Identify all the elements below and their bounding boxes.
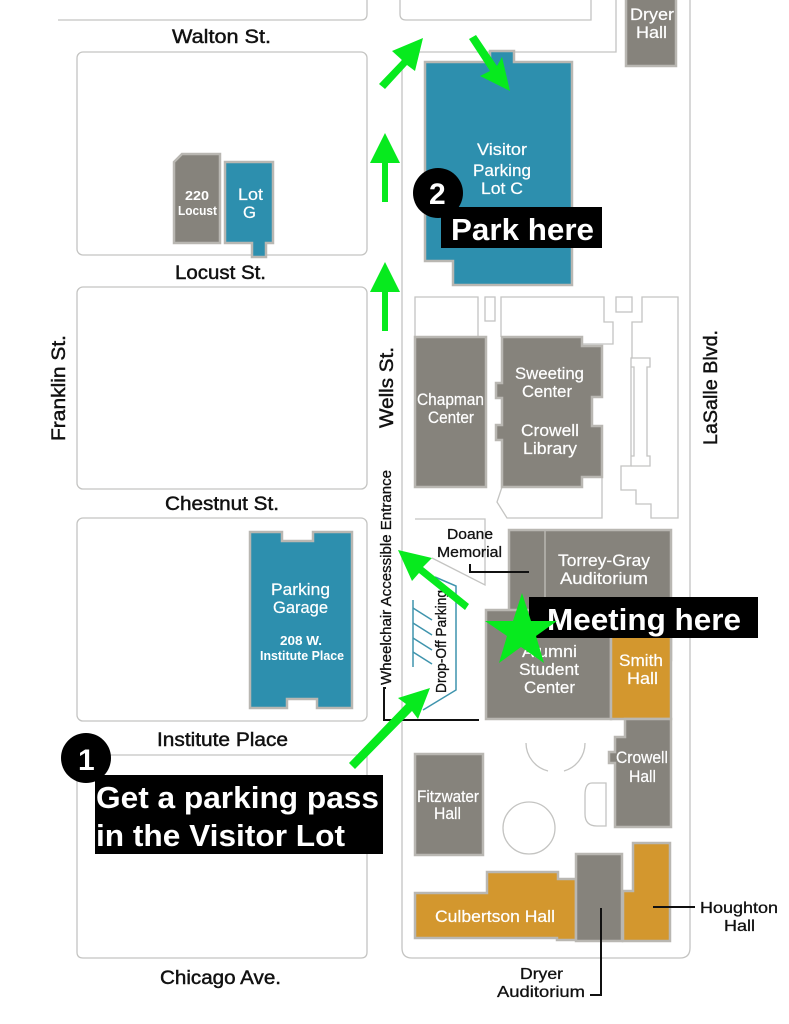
- parking: Lot G: G: [243, 203, 256, 222]
- building: 220 Locust: 220: [185, 188, 209, 203]
- label: Doane Memorial: Memorial: [437, 544, 502, 561]
- street label: Locust St.: Locust St.: [175, 263, 266, 284]
- parking: Lot G: [225, 162, 273, 257]
- arrow: to Walton St.: [379, 38, 423, 89]
- label: Dryer Auditorium: [497, 908, 601, 1001]
- building: Sweeting Center and Crowell Library: [496, 337, 602, 487]
- street label: Franklin St.: Franklin St.: [49, 335, 70, 441]
- parking: Parking Garage: Institute Place: [260, 649, 344, 663]
- step 2 marker: 2: [429, 178, 446, 211]
- icon: meeting star: [485, 593, 557, 663]
- parking: Parking Garage: Parking: [271, 580, 330, 599]
- building: Dryer Hall: Dryer: [630, 5, 674, 24]
- building: Alumni Student Center: [486, 610, 611, 719]
- label: Houghton Hall: [653, 900, 778, 935]
- callout: Get a parking pass in the Visitor Lot: [95, 775, 383, 854]
- parking: Lot G: Lot: [238, 185, 263, 204]
- unlabeled grounds outlines: [415, 297, 678, 854]
- street label: Institute Place: Institute Place: [157, 730, 288, 751]
- building: Smith Hall: [611, 636, 671, 719]
- label: Dryer Auditorium: Auditorium: [497, 984, 585, 1001]
- building: Culbertson Hall: [415, 872, 576, 940]
- building: Culbertson Hall: Culbertson Hall: [435, 907, 555, 926]
- arrow: to wheelchair entrance: [398, 550, 469, 610]
- building: Crowell Hall: [609, 719, 671, 827]
- step 1 marker: [61, 733, 111, 783]
- building: Alumni Student Center: Alumni: [522, 642, 577, 661]
- building: Sweeting Center and Crowell Library: Crowell: [521, 421, 579, 440]
- building: Houghton Hall: [623, 843, 670, 941]
- building: Torrey-Gray Auditorium: Torrey-Gray: [558, 551, 651, 570]
- wheelchair entrance leader line: [384, 688, 479, 720]
- building: Sweeting Center and Crowell Library: Center: [522, 382, 572, 401]
- city blocks: [58, 0, 591, 958]
- building: Dryer Hall: Hall: [636, 23, 667, 42]
- label: Wheelchair Accessible Entrance: Wheelchair Accessible Entrance: [378, 470, 395, 685]
- campus block outline: [402, 0, 690, 958]
- label: Drop-Off Parking: Drop-Off Parking: [433, 590, 450, 693]
- label: Houghton Hall: Hall: [724, 918, 755, 935]
- callout: Park here: Park here: [451, 212, 594, 247]
- callout: Get a parking pass in the Visitor Lot: Get a parking pass: [96, 780, 379, 815]
- callout: Get a parking pass in the Visitor Lot: in the Visitor Lot: [96, 818, 345, 853]
- parking: Visitor Parking Lot C: Visitor: [477, 140, 527, 159]
- parking: Parking Garage: 208 W.: [280, 634, 322, 648]
- building: 220 Locust: [174, 154, 220, 243]
- street label: Chicago Ave.: Chicago Ave.: [160, 968, 281, 989]
- arrow: north on Wells St. lower: [370, 262, 400, 331]
- building: Dryer Auditorium: [576, 854, 622, 941]
- parking: Parking Garage: Garage: [273, 598, 328, 617]
- label: Houghton Hall: Houghton: [700, 900, 778, 917]
- building: Fitzwater Hall: Hall: [434, 804, 461, 823]
- drop-off parking area: [413, 577, 456, 710]
- building: Crowell Hall: Crowell: [616, 748, 668, 767]
- street label: LaSalle Blvd.: LaSalle Blvd.: [701, 330, 722, 445]
- arrow: into Lot C: [469, 35, 510, 91]
- label: Dryer Auditorium: Dryer: [520, 966, 564, 983]
- street label: Wells St.: Wells St.: [377, 347, 398, 428]
- building: Sweeting Center and Crowell Library: Library: [523, 439, 578, 458]
- label: Doane Memorial: [437, 526, 529, 572]
- building: Alumni Student Center: Center: [524, 678, 575, 697]
- street label: Chestnut St.: Chestnut St.: [165, 494, 279, 515]
- callout: Meeting here: Meeting here: [547, 602, 741, 637]
- label: Doane Memorial: Doane: [447, 526, 493, 543]
- arrow: from visitor lot: [349, 688, 430, 769]
- building: 220 Locust: Locust: [178, 204, 218, 218]
- step 1 marker: 1: [78, 744, 95, 777]
- parking: Visitor Parking Lot C: Lot C: [481, 179, 523, 198]
- building: Fitzwater Hall: Fitzwater: [417, 787, 479, 806]
- parking: Visitor Parking Lot C: [425, 51, 572, 285]
- building: Torrey-Gray Auditorium: [509, 530, 671, 660]
- building: Chapman Center: Chapman: [417, 390, 484, 409]
- building: Dryer Hall: [626, 0, 676, 66]
- building: Chapman Center: [415, 337, 486, 487]
- building: Sweeting Center and Crowell Library: Sweeting: [515, 364, 584, 383]
- building: Fitzwater Hall: [415, 754, 483, 855]
- street label: Walton St.: Walton St.: [172, 27, 271, 48]
- parking: Visitor Parking Lot C: Parking: [473, 161, 531, 180]
- building: Torrey-Gray Auditorium: Auditorium: [560, 569, 648, 588]
- step 2 marker: [413, 168, 463, 218]
- building: Chapman Center: Center: [428, 408, 474, 427]
- building: Crowell Hall: Hall: [629, 767, 656, 786]
- parking: Parking Garage: [250, 532, 352, 708]
- building: Alumni Student Center: Student: [519, 660, 579, 679]
- building: Smith Hall: Hall: [627, 669, 658, 688]
- building: Smith Hall: Smith: [619, 651, 663, 670]
- arrow: north on Wells St. upper: [370, 133, 400, 202]
